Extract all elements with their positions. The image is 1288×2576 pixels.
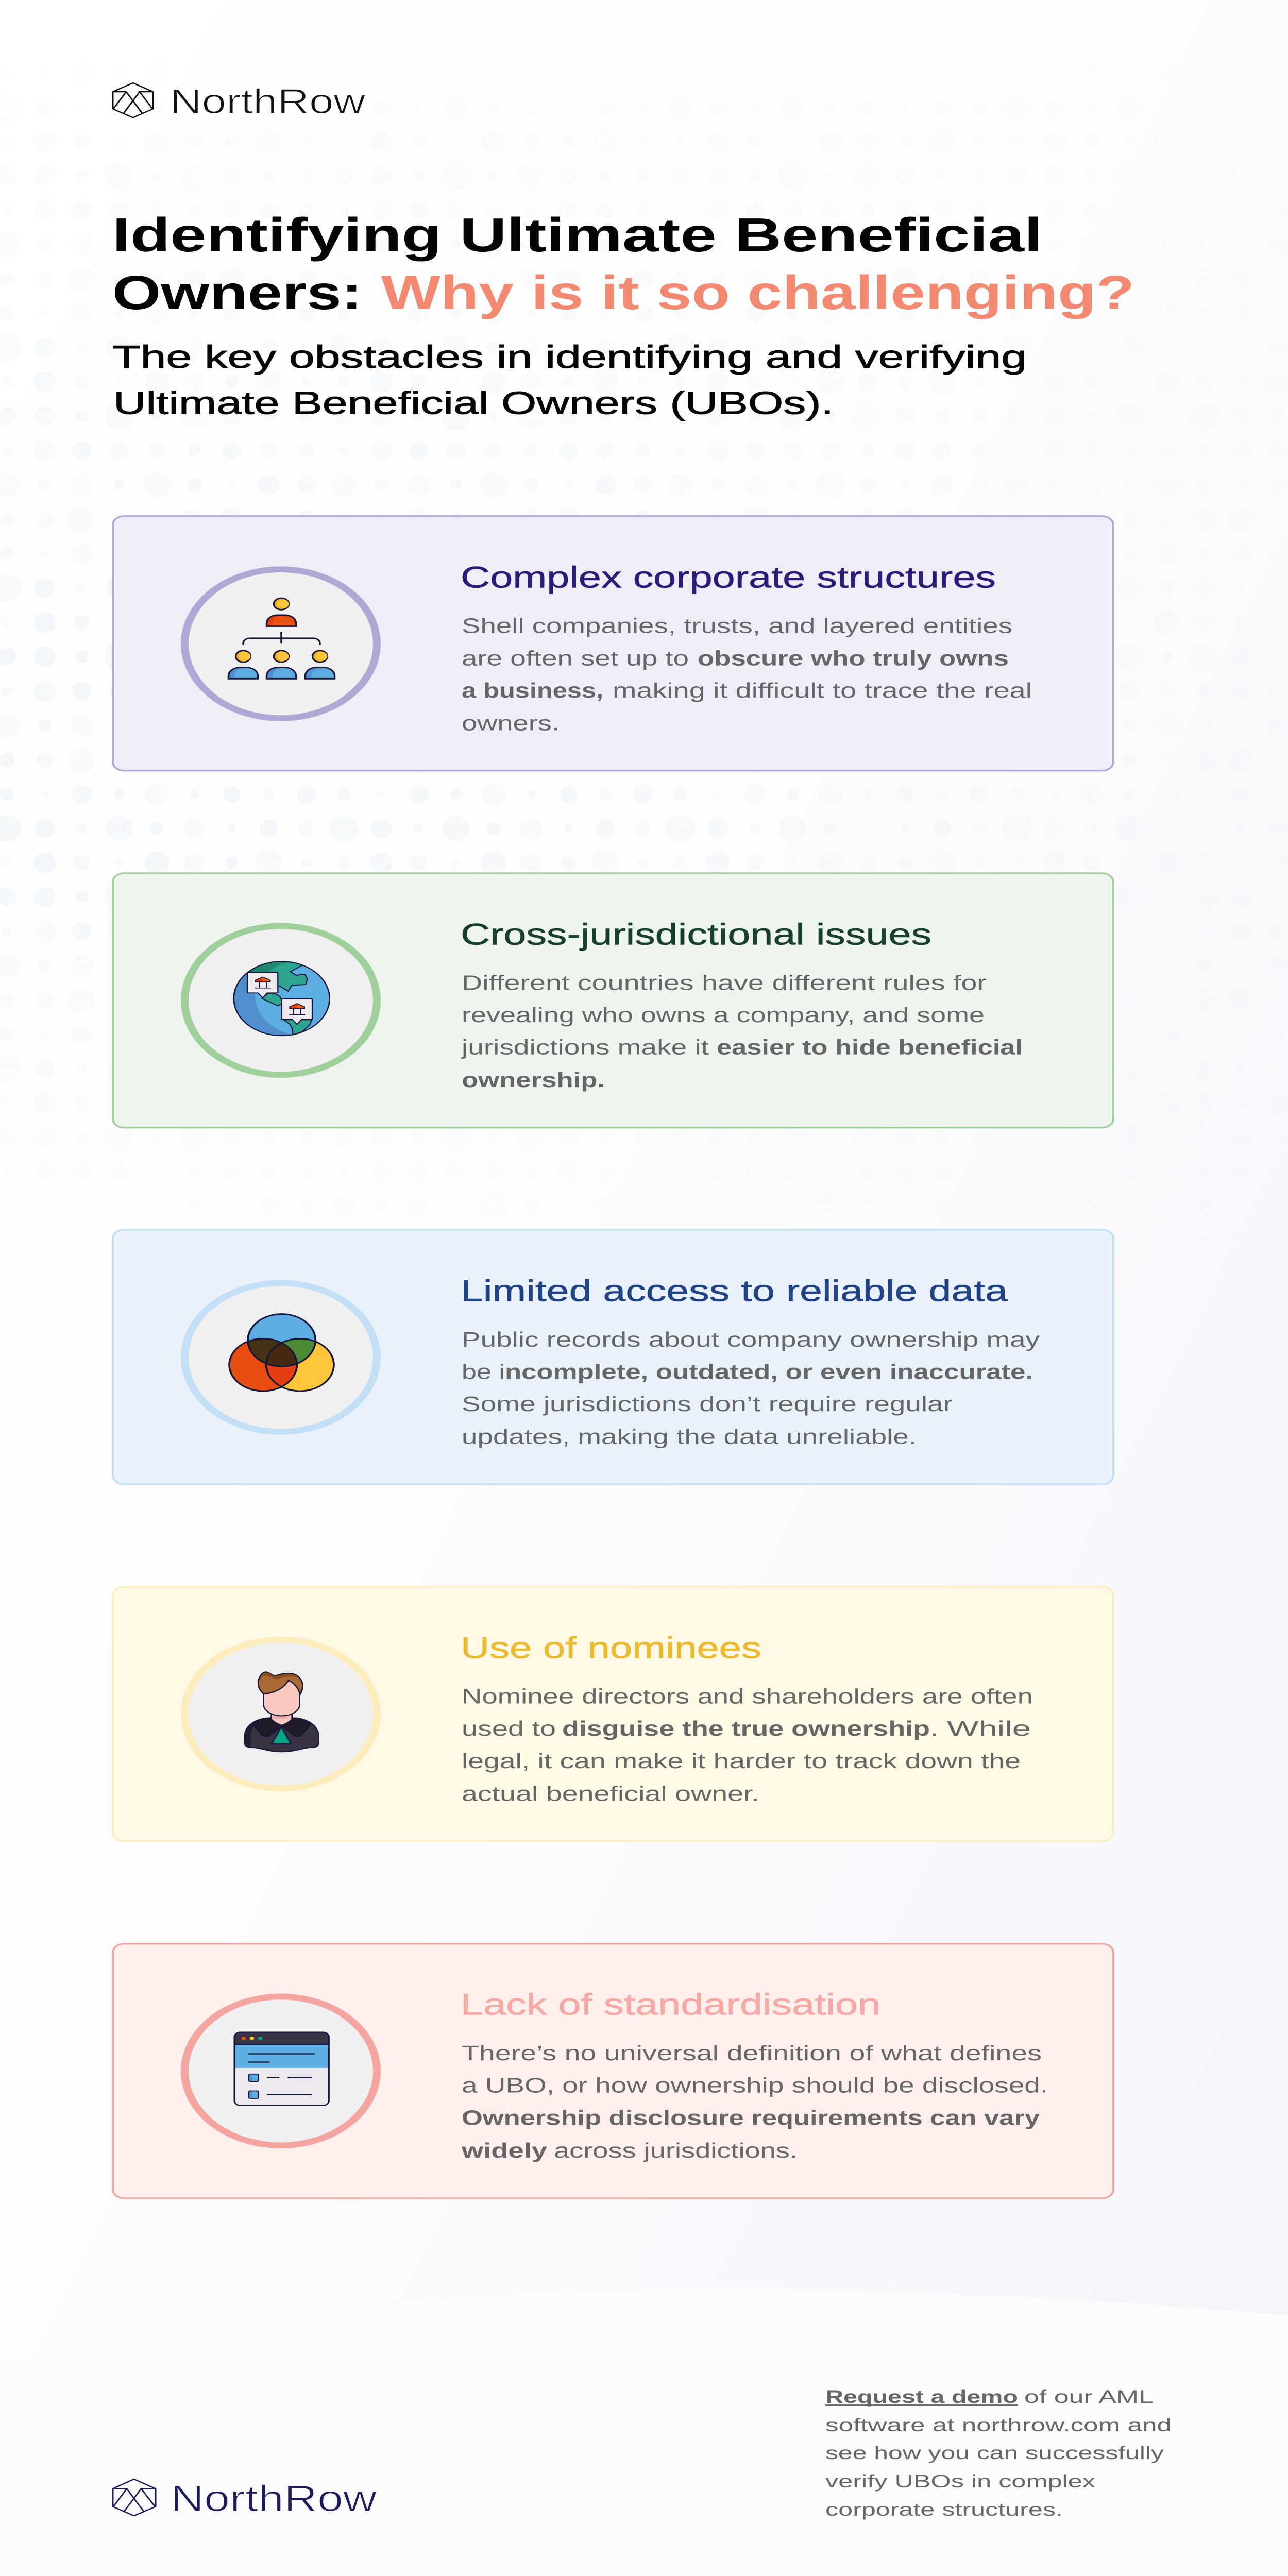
body text: Nominee directors and shareholders are often: [462, 1685, 1033, 1708]
body text: are often set up to: [462, 647, 689, 670]
body text: Shell companies, trusts, and layered entities: [462, 614, 1012, 638]
heading: Cross-jurisdictional issues: [461, 918, 931, 951]
body text: easier to hide beneficial: [717, 1036, 1023, 1059]
icon: nominee person: [184, 1639, 377, 1788]
card background: [113, 873, 1113, 1128]
call to action text: of our AML: [1024, 2386, 1154, 2407]
body text: updates, making the data unreliable.: [462, 1425, 917, 1449]
body text: obscure who truly owns: [698, 647, 1009, 670]
icon: NorthRow hexagon mark navy: [113, 2479, 156, 2516]
body text: Public records about company ownership may: [462, 1328, 1040, 1351]
logo: NorthRow header: [113, 81, 366, 121]
subtitle: [112, 339, 1027, 421]
body text: [461, 971, 1023, 1092]
icon: browser form window: [184, 1996, 377, 2145]
title: [112, 208, 1134, 319]
logo wordmark: NorthRow: [170, 81, 366, 121]
body text: legal, it can make it harder to track down the: [462, 1749, 1021, 1773]
subtitle: Ultimate Beneficial Owners (UBOs).: [113, 385, 834, 421]
body text: actual beneficial owner.: [462, 1782, 759, 1806]
icon: venn diagram: [184, 1283, 377, 1432]
body text: Some jurisdictions don’t require regular: [462, 1393, 953, 1416]
body text: [461, 2042, 1048, 2162]
body text: jurisdictions make it: [461, 1036, 709, 1059]
body text: [462, 614, 1032, 735]
panel: cross-jurisdictional issues: [113, 873, 1113, 1128]
body text: There’s no universal definition of what defines: [462, 2042, 1042, 2065]
body text: a business,: [462, 679, 603, 703]
icon: globe with bank markers: [184, 926, 377, 1075]
body text: .: [930, 1717, 938, 1741]
body text: a UBO, or how ownership should be disclosed.: [462, 2074, 1048, 2097]
body text: ownership.: [462, 1069, 605, 1092]
title: Owners:: [112, 266, 362, 319]
body text: Different countries have different rules for: [462, 971, 987, 995]
panel: use of nominees: [113, 1587, 1113, 1841]
call to action text: corporate structures.: [825, 2499, 1063, 2520]
title: Why is it so challenging?: [381, 266, 1134, 319]
call to action text: see how you can successfully: [825, 2443, 1164, 2463]
card background: [113, 1587, 1113, 1841]
card background: [113, 1230, 1113, 1484]
body text: Ownership disclosure requirements can vary: [462, 2106, 1040, 2130]
body text: making it difficult to trace the real: [613, 679, 1032, 703]
body text: disguise the true ownership: [562, 1717, 930, 1741]
call to action text: software at northrow.com and: [825, 2415, 1172, 2435]
panel: complex corporate structures: [113, 516, 1113, 771]
logo wordmark: NorthRow: [171, 2479, 377, 2519]
panel: lack of standardisation: [113, 1944, 1113, 2198]
heading: Complex corporate structures: [461, 561, 996, 594]
heading: Lack of standardisation: [461, 1988, 880, 2022]
icon: organisation hierarchy: [184, 569, 377, 718]
subtitle: The key obstacles in identifying and verifying: [112, 339, 1027, 375]
body text: used to: [462, 1717, 556, 1741]
body text: widely: [461, 2139, 548, 2162]
card background: [113, 516, 1113, 771]
call to action text: verify UBOs in complex: [825, 2471, 1096, 2492]
icon: NorthRow hexagon mark: [113, 83, 153, 117]
body text: While: [947, 1717, 1031, 1741]
body text: revealing who owns a company, and some: [462, 1004, 985, 1027]
heading: Use of nominees: [461, 1632, 761, 1665]
logo: NorthRow footer: [113, 2479, 377, 2519]
call to action text: Request a demo: [825, 2386, 1018, 2407]
panel: limited access to reliable data: [113, 1230, 1113, 1484]
body text: owners.: [462, 711, 560, 735]
body text: across jurisdictions.: [554, 2139, 798, 2162]
call to action text: [825, 2386, 1172, 2520]
body text: [462, 1685, 1033, 1806]
title: Identifying Ultimate Beneficial: [112, 208, 1042, 262]
body text: [462, 1328, 1040, 1449]
body text: ncomplete, outdated, or even inaccurate.: [505, 1360, 1033, 1384]
heading: Limited access to reliable data: [461, 1275, 1008, 1308]
body text: be i: [462, 1360, 505, 1384]
card background: [113, 1944, 1113, 2198]
